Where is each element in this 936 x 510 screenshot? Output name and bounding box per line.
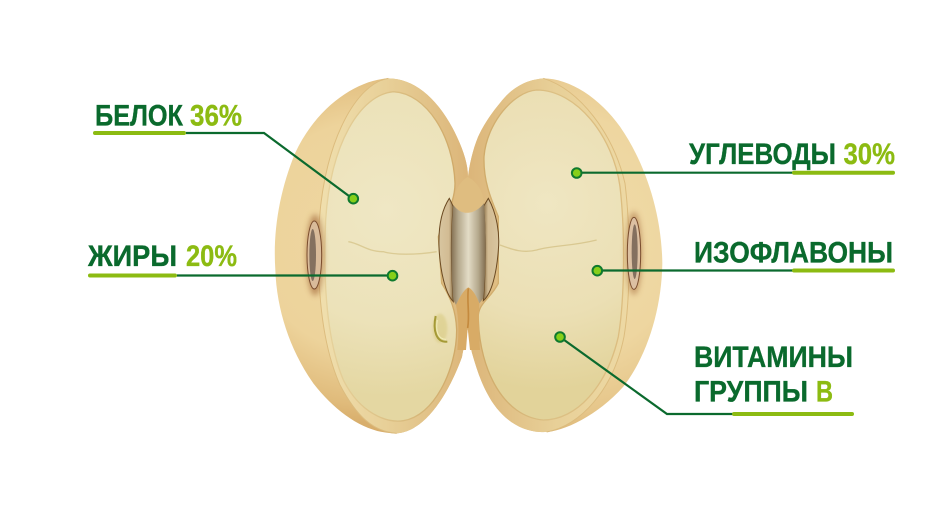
percentage: 30% bbox=[844, 138, 895, 171]
soybean illustration bbox=[275, 78, 662, 433]
left seed scar bbox=[306, 214, 324, 296]
callout: B vitamins bbox=[555, 332, 854, 416]
leader line bbox=[186, 133, 353, 199]
callout: carbohydrates bbox=[572, 138, 895, 178]
marker dot bbox=[555, 332, 565, 342]
marker dot bbox=[348, 194, 358, 204]
label: ИЗОФЛАВОНЫ bbox=[694, 237, 893, 270]
callout: isoflavones bbox=[592, 237, 895, 276]
callout: protein bbox=[93, 100, 358, 204]
label: БЕЛОК bbox=[95, 100, 184, 132]
label: ЖИРЫ bbox=[87, 240, 177, 273]
marker dot bbox=[592, 266, 602, 276]
right cotyledon bbox=[478, 90, 624, 420]
label line one: ВИТАМИНЫ bbox=[694, 341, 853, 374]
vitamin letter: В bbox=[816, 376, 833, 409]
accent underline bbox=[792, 268, 895, 272]
right seed scar bbox=[626, 212, 642, 295]
leader line bbox=[560, 337, 733, 414]
percentage: 36% bbox=[190, 100, 242, 132]
left cotyledon crease bbox=[348, 242, 437, 254]
leader line bbox=[177, 274, 392, 277]
leader line bbox=[577, 172, 793, 174]
accent underline bbox=[88, 274, 177, 278]
label line two: ГРУППЫ bbox=[694, 376, 808, 409]
label: УГЛЕВОДЫ bbox=[689, 138, 836, 171]
oil droplet bbox=[433, 314, 447, 343]
callout: fats bbox=[87, 240, 397, 281]
marker dot bbox=[572, 168, 582, 178]
accent underline bbox=[792, 171, 895, 175]
marker dot bbox=[388, 271, 397, 281]
right cotyledon crease bbox=[500, 240, 597, 251]
accent underline bbox=[93, 131, 186, 135]
percentage: 20% bbox=[186, 240, 237, 273]
central hilum bbox=[439, 177, 499, 350]
left seed half bbox=[275, 78, 468, 433]
leader line bbox=[597, 269, 793, 272]
right seed half bbox=[468, 78, 662, 432]
accent underline bbox=[732, 412, 854, 416]
